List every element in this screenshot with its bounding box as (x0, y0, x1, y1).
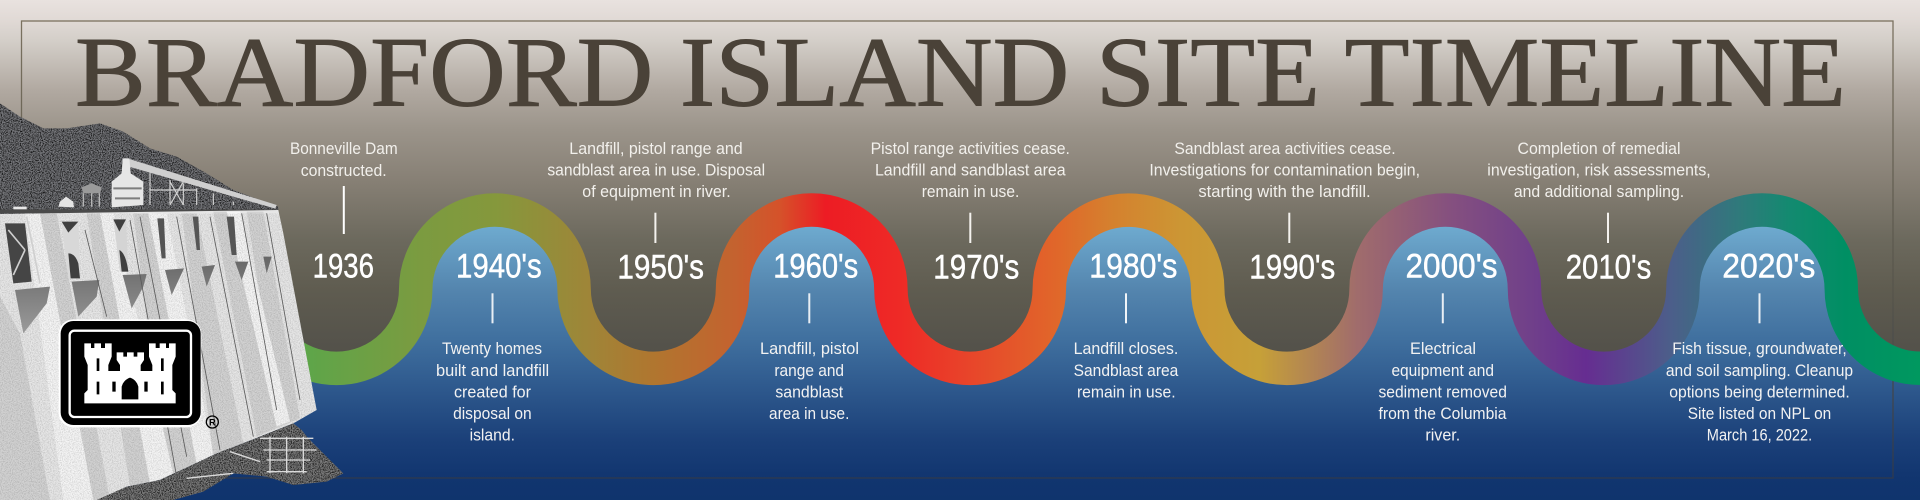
1960's description: Landfill, pistol (760, 339, 859, 358)
1940's description (436, 339, 549, 444)
2000's year: 2000's (1406, 248, 1498, 286)
2020's description (1666, 339, 1853, 444)
2000's description (1378, 339, 1507, 444)
dam face (0, 210, 320, 500)
1940's description: island. (470, 425, 515, 444)
2020's year: 2020's (1722, 248, 1815, 286)
2000's description: sediment removed (1378, 382, 1507, 401)
milestone: 1990's (1149, 139, 1420, 286)
1980's connector (1125, 293, 1127, 323)
1980's year: 1980's (1089, 248, 1177, 286)
1980's description: Sandblast area (1074, 361, 1179, 380)
1940's description: built and landfill (436, 361, 549, 380)
1936 description: constructed. (301, 161, 387, 180)
1940's connector (492, 293, 494, 323)
2020's description: and soil sampling. Cleanup (1666, 361, 1853, 380)
1970's description (871, 139, 1070, 201)
2020's description: Site listed on NPL on (1688, 404, 1831, 423)
icon: castle (84, 343, 176, 403)
2020's connector (1758, 293, 1760, 323)
2010's description (1487, 139, 1711, 201)
mountain behind dam (0, 100, 283, 217)
1980's description: Landfill closes. (1074, 339, 1178, 358)
1970's description: remain in use. (922, 182, 1019, 201)
illustration: Bonneville Dam photo (0, 100, 347, 500)
1950's description: of equipment in river. (582, 182, 731, 201)
milestone: 2020's (1666, 248, 1853, 444)
2010's description: investigation, risk assessments, (1487, 161, 1711, 180)
milestone: 1950's (547, 139, 765, 286)
1936 connector (343, 186, 345, 234)
1960's description: range and (774, 361, 844, 380)
logo plate (59, 319, 201, 427)
milestone: 1940's (436, 248, 549, 444)
1936 description: Bonneville Dam (290, 139, 398, 158)
1940's description: created for (454, 382, 531, 401)
1970's year: 1970's (933, 248, 1019, 286)
1990's description: starting with the landfill. (1198, 182, 1371, 201)
milestone: 1936 (290, 139, 398, 286)
1970's description: Pistol range activities cease. (871, 139, 1070, 158)
1980's description (1074, 339, 1179, 401)
1950's description: sandblast area in use. Disposal (547, 161, 765, 180)
1990's description (1149, 139, 1420, 201)
2010's description: Completion of remedial (1518, 139, 1680, 158)
logo black field (61, 321, 201, 425)
milestone: 1960's (760, 248, 859, 423)
1970's connector (969, 213, 971, 243)
1960's description (760, 339, 859, 423)
construction structures on dam (0, 158, 278, 213)
1940's year: 1940's (456, 248, 542, 286)
1940's description: disposal on (453, 404, 532, 423)
2010's connector (1607, 213, 1609, 243)
milestone: 2000's (1378, 248, 1507, 444)
1950's year: 1950's (617, 248, 704, 286)
2000's description: equipment and (1391, 361, 1494, 380)
1980's description: remain in use. (1077, 382, 1176, 401)
1950's description (547, 139, 765, 201)
1960's connector (808, 293, 810, 323)
title: BRADFORD ISLAND SITE TIMELINE (75, 16, 1846, 128)
1960's description: area in use. (769, 404, 849, 423)
shoreline debris at dam base (96, 423, 344, 500)
1960's year: 1960's (773, 248, 858, 286)
1950's connector (654, 213, 656, 243)
2000's description: Electrical (1410, 339, 1476, 358)
1970's description: Landfill and sandblast area (875, 161, 1066, 180)
2010's description: and additional sampling. (1514, 182, 1684, 201)
2000's connector (1442, 293, 1444, 323)
background: water below ribbon (0, 210, 1920, 500)
winding rainbow ribbon (257, 210, 1920, 368)
1950's description: Landfill, pistol range and (569, 139, 743, 158)
milestone: 2010's (1487, 139, 1711, 286)
1990's connector (1288, 213, 1290, 243)
1990's description: Sandblast area activities cease. (1174, 139, 1396, 158)
1960's description: sandblast (775, 382, 843, 401)
2020's description: March 16, 2022. (1707, 425, 1812, 444)
1936 description (290, 139, 398, 180)
registered trademark mark: R (209, 417, 216, 427)
1990's year: 1990's (1249, 248, 1335, 286)
2010's year: 2010's (1566, 248, 1651, 286)
1940's description: Twenty homes (442, 339, 542, 358)
1990's description: Investigations for contamination begin, (1149, 161, 1420, 180)
logo inner outline (70, 331, 191, 417)
2020's description: options being determined. (1669, 382, 1850, 401)
2020's description: Fish tissue, groundwater, (1672, 339, 1847, 358)
1936 year: 1936 (313, 248, 374, 286)
2000's description: from the Columbia (1378, 404, 1507, 423)
logo: US Army Corps of Engineers castle (59, 319, 218, 428)
milestone: 1980's (1074, 248, 1179, 401)
2000's description: river. (1425, 425, 1460, 444)
milestone: 1970's (871, 139, 1070, 286)
